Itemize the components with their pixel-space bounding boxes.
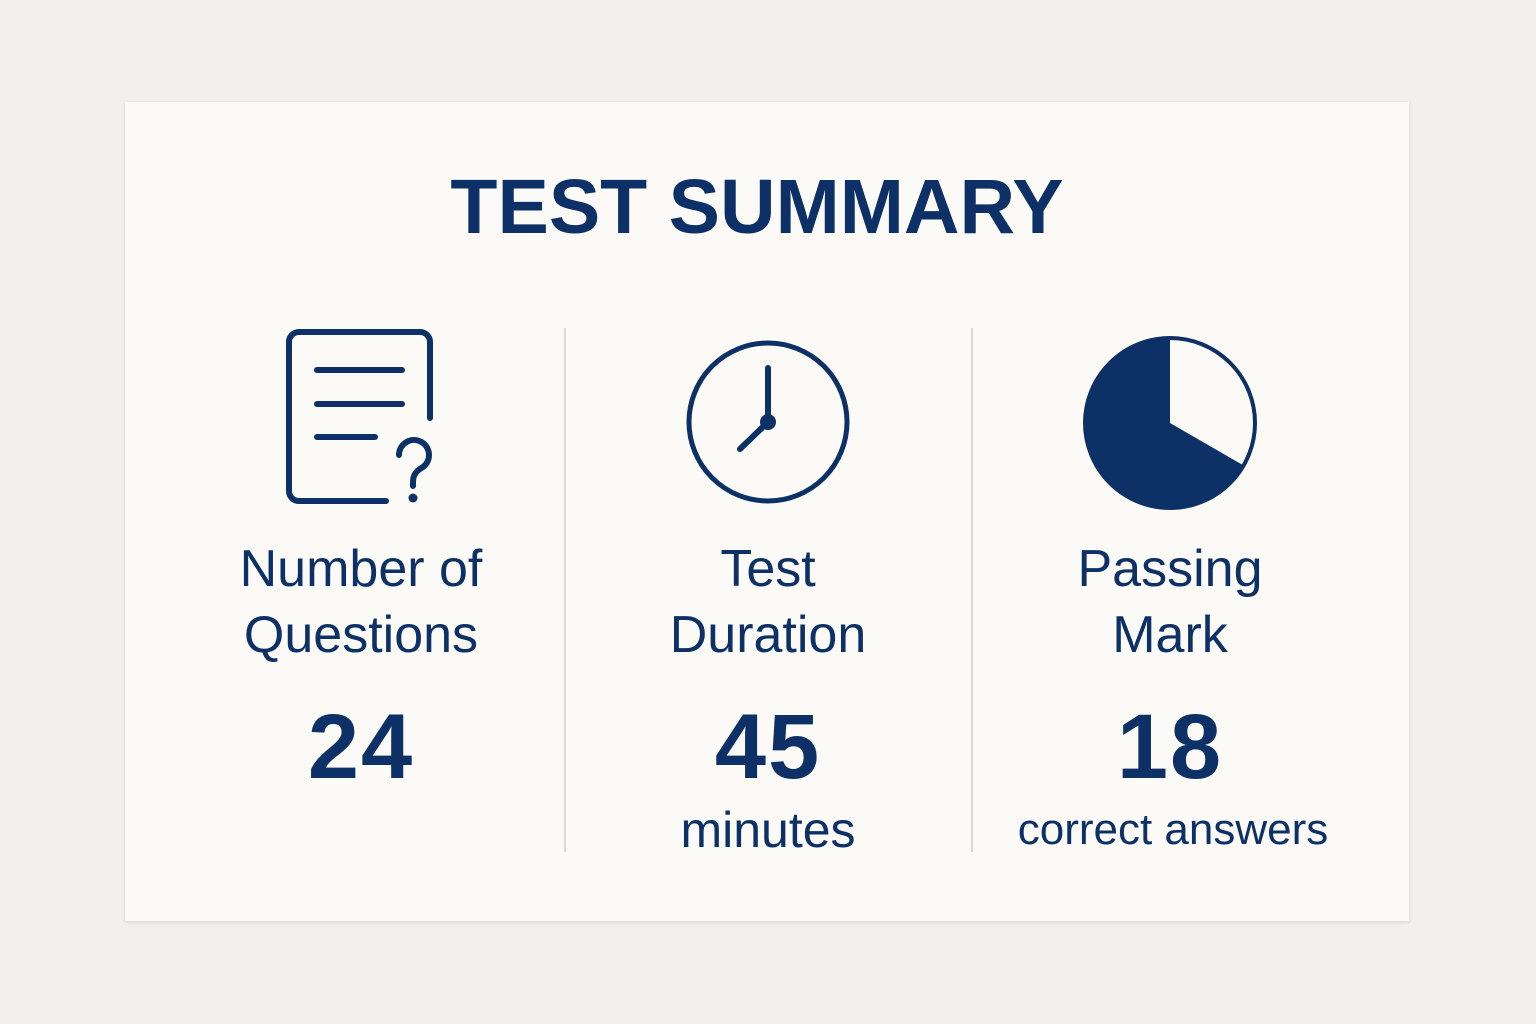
column 3 text: Passing	[1078, 540, 1262, 598]
card panel	[125, 102, 1409, 921]
icon: document with question mark	[286, 329, 433, 504]
column 2 text: Test	[720, 540, 816, 598]
column 1 text: Questions	[244, 606, 478, 664]
icon: clock	[686, 340, 850, 504]
number 45: 45	[715, 696, 821, 798]
icon: pie chart	[1083, 336, 1257, 510]
title: TEST SUMMARY	[450, 164, 1064, 250]
minutes label: minutes	[680, 802, 856, 858]
column 2 text	[670, 540, 866, 664]
column 3 text	[1078, 540, 1262, 664]
number 24: 24	[308, 696, 414, 798]
column 2 text: Duration	[670, 606, 866, 664]
correct answers label: correct answers	[1018, 805, 1328, 854]
column 1 text: Number of	[240, 540, 482, 598]
column 3 text: Mark	[1112, 606, 1228, 664]
column 1 text	[240, 540, 482, 664]
number 18: 18	[1117, 696, 1223, 798]
